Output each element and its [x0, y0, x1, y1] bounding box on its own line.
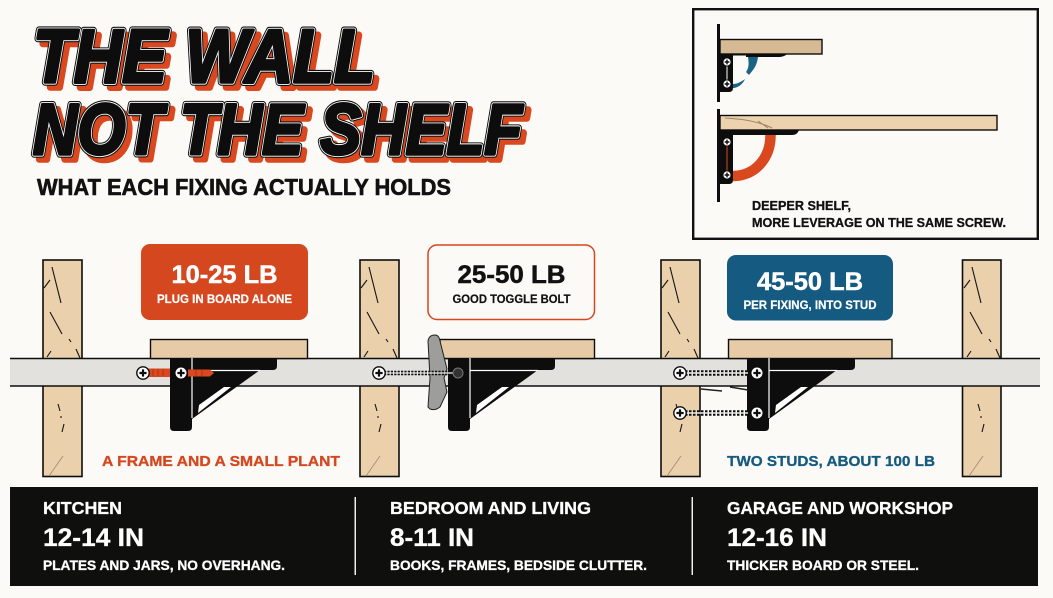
bedroom and living: 8-11 IN — [390, 524, 474, 552]
badge: plug: PLUG IN BOARD ALONE — [157, 294, 292, 306]
fixing 2: toggle bolt — [373, 335, 594, 431]
panel: leverage comparison — [693, 9, 1038, 239]
shelf 2 — [440, 340, 594, 358]
badge: toggle bolt: 25-50 LB — [458, 261, 566, 289]
garage and workshop: THICKER BOARD OR STEEL. — [727, 558, 919, 573]
caption: stud: TWO STUDS, ABOUT 100 LB — [727, 453, 935, 470]
title: NOT THE SHELF — [33, 91, 523, 170]
toggle screw — [373, 367, 463, 379]
bedroom and living: BEDROOM AND LIVING — [390, 498, 591, 518]
title: THE WALL — [33, 14, 375, 98]
toggle wing — [428, 335, 447, 410]
garage and workshop: 12-16 IN — [727, 524, 827, 552]
badge: stud — [727, 255, 893, 320]
deep shelf diagram — [717, 109, 997, 202]
title: THE WALL — [33, 14, 375, 98]
kitchen: KITCHEN — [43, 498, 122, 518]
title: NOT THE SHELF — [38, 96, 528, 175]
caption: plug: A FRAME AND A SMALL PLANT — [102, 453, 341, 470]
wall board — [10, 358, 1040, 386]
bracket 2 — [448, 358, 555, 431]
bedroom and living: BOOKS, FRAMES, BEDSIDE CLUTTER. — [390, 558, 647, 573]
kitchen: 12-14 IN — [43, 524, 144, 552]
leverage caption: DEEPER SHELF, — [752, 198, 851, 213]
badge: stud: PER FIXING, INTO STUD — [744, 300, 876, 312]
badge: toggle bolt: GOOD TOGGLE BOLT — [452, 294, 570, 306]
bracket 3 — [747, 358, 855, 431]
short shelf diagram — [717, 24, 822, 102]
title: NOT THE SHELF — [33, 91, 523, 170]
leverage caption — [752, 198, 1006, 230]
fixing 1: plug in board — [137, 340, 308, 431]
bracket 1 — [170, 358, 277, 431]
title: NOT THE SHELF — [33, 91, 523, 170]
title: THE WALL — [33, 14, 375, 98]
badge: toggle bolt — [428, 245, 594, 320]
garage and workshop: GARAGE AND WORKSHOP — [727, 498, 953, 518]
shelf 3 — [728, 340, 892, 358]
shelf 1 — [150, 340, 308, 358]
bedroom and living — [390, 498, 647, 573]
badge: stud: 45-50 LB — [757, 268, 863, 296]
stud screws — [674, 367, 763, 419]
badge: plug — [141, 244, 308, 320]
title: THE WALL — [38, 19, 380, 103]
kitchen: PLATES AND JARS, NO OVERHANG. — [43, 558, 285, 573]
garage and workshop — [727, 498, 953, 573]
leverage caption: MORE LEVERAGE ON THE SAME SCREW. — [752, 215, 1006, 230]
studs — [43, 260, 1001, 476]
badge: plug: 10-25 LB — [172, 261, 278, 289]
plug anchor — [137, 367, 214, 379]
title — [33, 14, 528, 175]
panel: room depths — [10, 487, 1038, 586]
subtitle: WHAT EACH FIXING ACTUALLY HOLDS — [37, 174, 451, 200]
fixing 3: into stud — [674, 340, 892, 431]
kitchen — [43, 498, 285, 573]
